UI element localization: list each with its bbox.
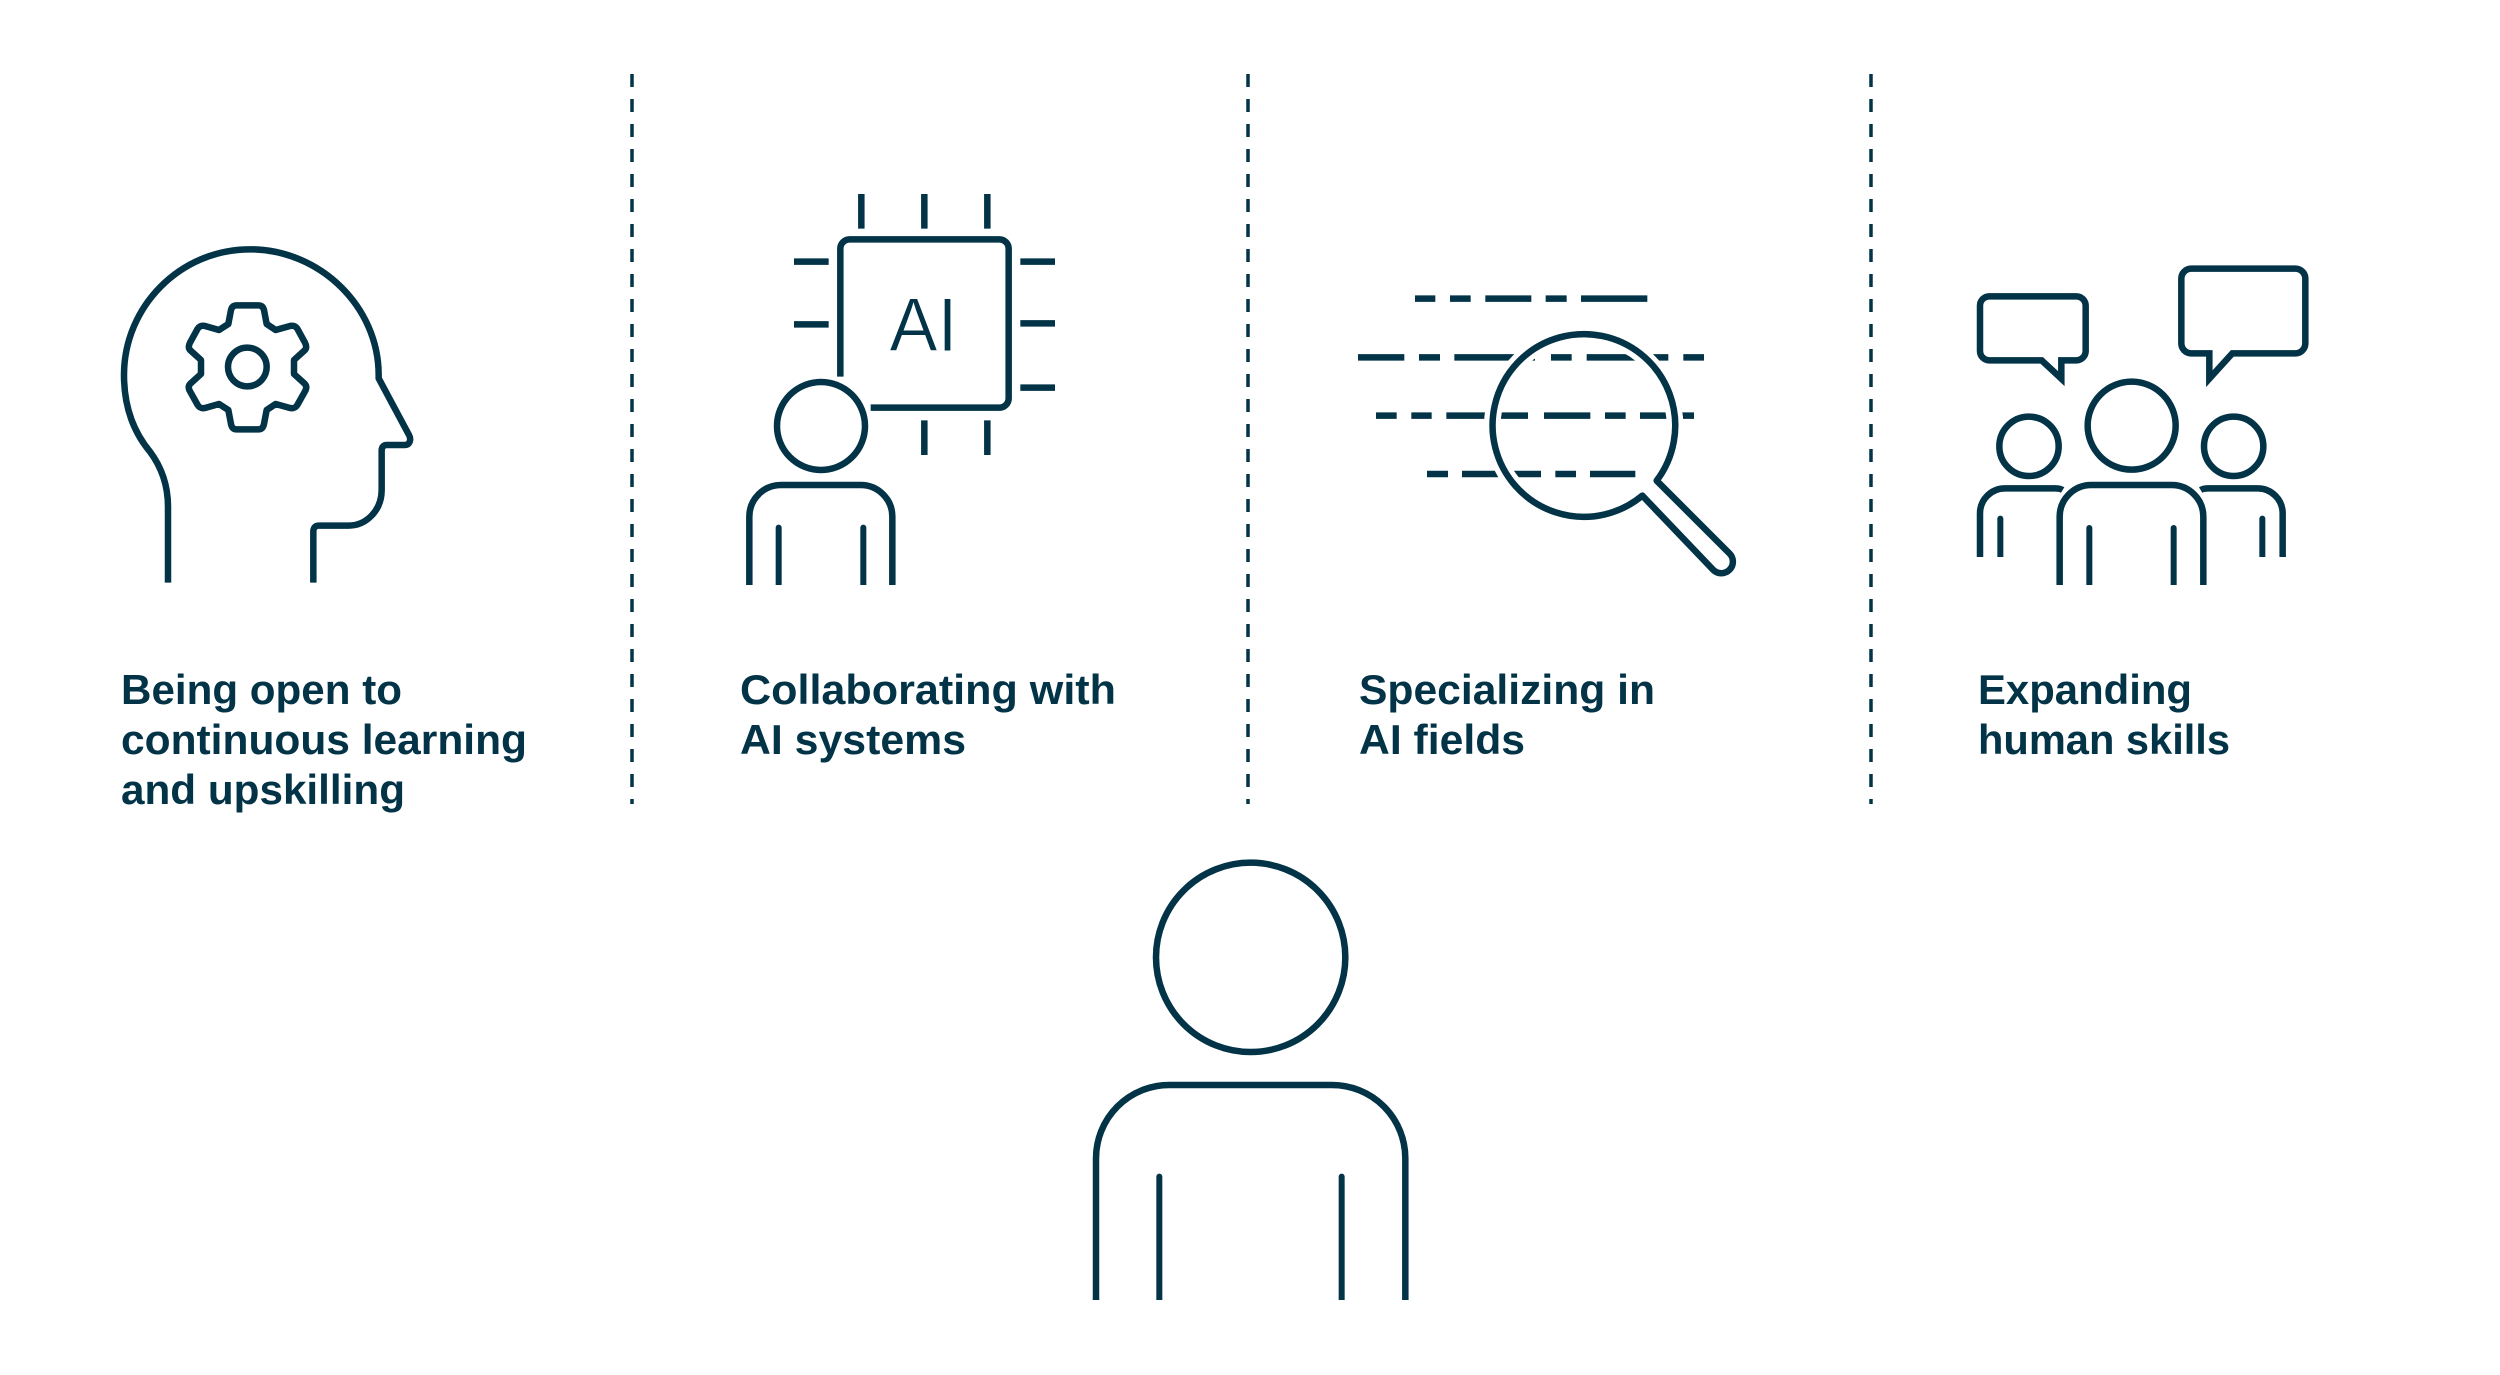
central person [1096, 863, 1405, 1300]
chip pins [794, 194, 1055, 455]
label: continuous learning: and upskilling [121, 766, 405, 813]
gear [189, 305, 306, 429]
label: continuous learning: Being open to [121, 666, 402, 713]
left speech bubble [1980, 296, 2086, 379]
lens halo [1492, 334, 1675, 517]
label: collaborating: AI systems [740, 716, 966, 763]
right speech bubble [2181, 269, 2305, 379]
person body [749, 485, 892, 585]
icon: magnifier over text lines [1358, 299, 1733, 573]
text lines [1358, 299, 1704, 474]
divider 3 [1869, 74, 1873, 804]
icon: group with speech bubbles [1980, 269, 2305, 585]
panel: continuous learning [121, 249, 527, 813]
label: human skills: Expanding [1978, 666, 2192, 713]
label: continuous learning: continuous learning [121, 716, 527, 763]
gear hub [228, 348, 267, 386]
panel: collaborating with AI [740, 194, 1116, 763]
person arms [776, 525, 866, 585]
divider 2 [1246, 74, 1250, 804]
label: specializing: AI fields [1359, 716, 1525, 763]
label: specializing: Specializing in [1359, 666, 1655, 713]
left head [1999, 417, 2059, 476]
person head [777, 382, 865, 470]
center arms [2086, 525, 2177, 585]
label: human skills: human skills [1978, 716, 2230, 763]
left body [1980, 488, 2063, 557]
panel: specializing in AI [1358, 299, 1733, 763]
center head [2088, 382, 2176, 470]
head outline [124, 249, 410, 583]
chip outline [840, 239, 1009, 408]
body [1096, 1085, 1405, 1300]
divider 1 [630, 74, 634, 804]
icon: person and AI chip [749, 194, 1055, 585]
right arm [2259, 516, 2265, 557]
arms [1156, 1174, 1345, 1300]
icon: head with gear [124, 249, 410, 583]
right head [2204, 417, 2263, 476]
lens and handle [1493, 334, 1733, 573]
center body [2060, 485, 2203, 585]
head [1156, 863, 1345, 1052]
left arm [1997, 516, 2003, 557]
label: collaborating: Collaborating with [740, 666, 1116, 713]
chip letters: AI [889, 282, 958, 367]
right body [2201, 488, 2283, 557]
panel: human skills [1978, 269, 2305, 763]
